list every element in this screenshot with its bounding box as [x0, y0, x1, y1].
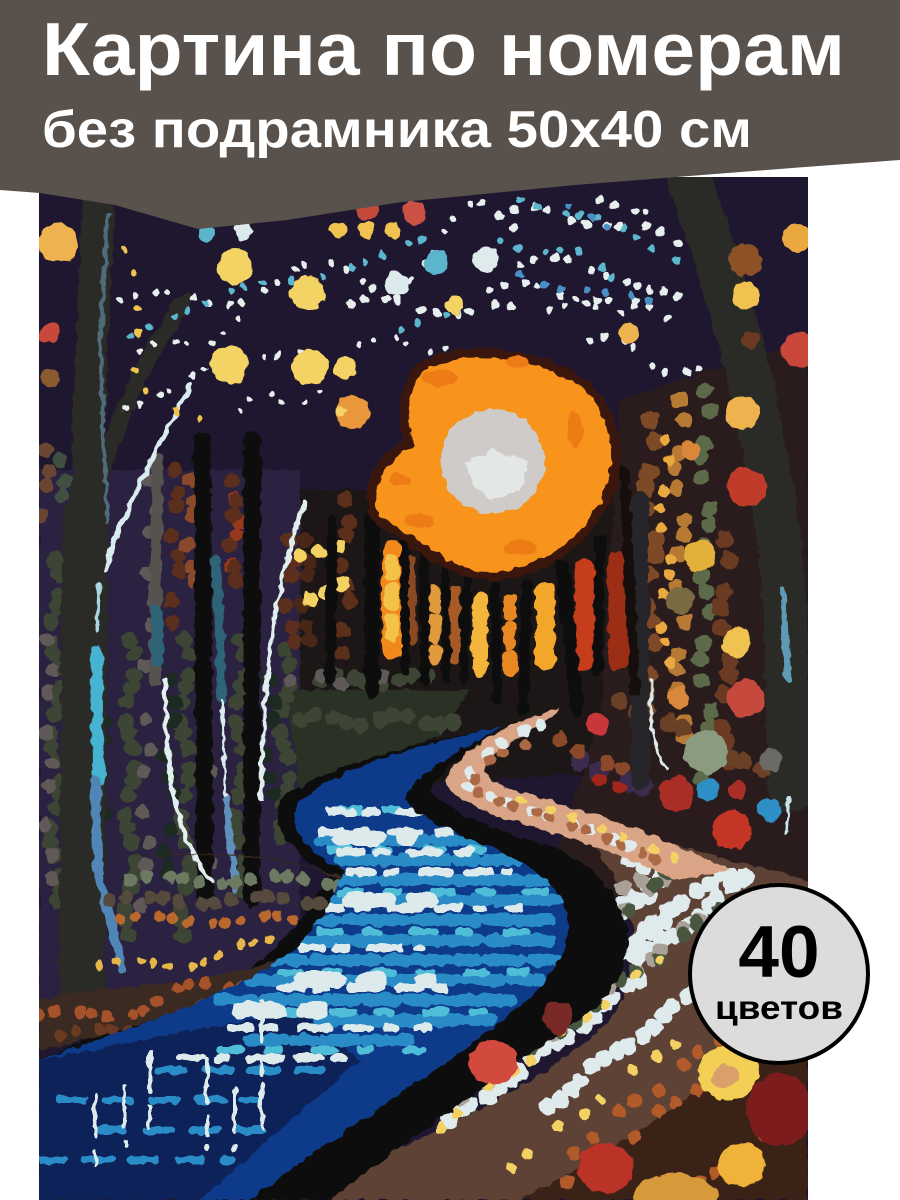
- large lanterns: [38, 196, 639, 429]
- bank speckles: [39, 876, 350, 1035]
- sun halo: [371, 352, 616, 576]
- right side ornaments: [586, 224, 818, 850]
- moon: [441, 409, 545, 513]
- foreground leaves: [468, 1001, 814, 1200]
- pale upper strip of the path: [447, 708, 730, 880]
- forest mottling: [41, 450, 460, 940]
- badge: 40 colours: [690, 885, 868, 1063]
- river ripples: [40, 810, 560, 1165]
- dark river bank: [39, 726, 628, 1200]
- sky dots: [120, 200, 710, 420]
- strip speckles: [465, 725, 680, 862]
- banner: [0, 0, 900, 229]
- river: [39, 720, 599, 1200]
- left bank: [39, 852, 342, 1050]
- light streaks on trunks: [95, 215, 789, 968]
- trees: [82, 180, 790, 1000]
- forest base colour masses: [39, 340, 808, 1000]
- gravel base: [332, 842, 808, 1200]
- subtitle: без подрамника 50х40 см: [42, 101, 752, 159]
- badge: 40 colours: 40: [738, 912, 820, 993]
- forest glow behind the trunks: [300, 545, 618, 680]
- right side earth dabs: [560, 390, 780, 800]
- title: Картина по номерам: [42, 7, 845, 91]
- painting: night forest with moon and river: [38, 177, 818, 1200]
- gravel speckles: [436, 857, 762, 1189]
- sun highlights: [390, 356, 583, 555]
- lower right darker earth: [521, 1060, 808, 1200]
- badge: 40 colours: цветов: [715, 989, 843, 1026]
